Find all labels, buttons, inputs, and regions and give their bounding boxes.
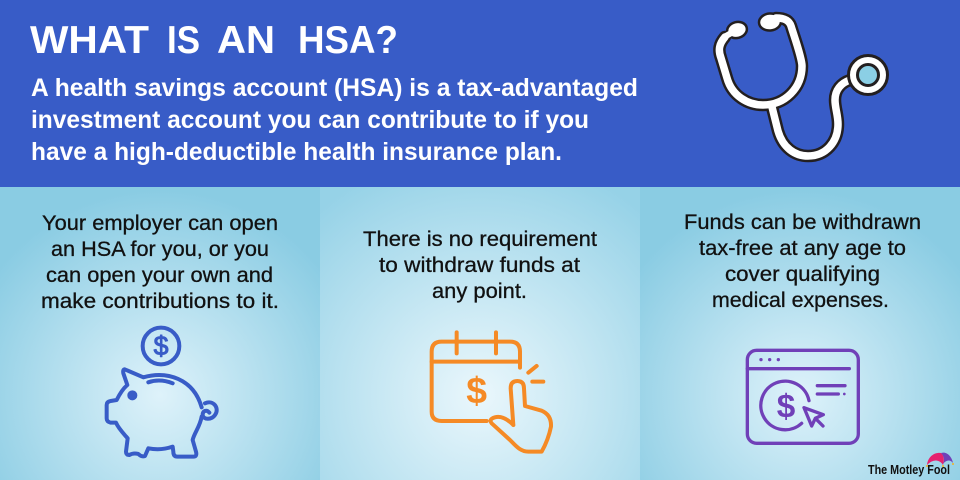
panel: no withdrawal requirement	[320, 187, 640, 480]
icon: browser window with dollar	[747, 350, 858, 443]
panel text: employer: an HSA for you, or you	[51, 238, 269, 261]
panel text: no requirement: There is no requirement	[363, 228, 597, 251]
intro text	[31, 74, 638, 166]
panel text: tax-free: Funds can be withdrawn	[684, 211, 921, 234]
panel: employer	[0, 187, 320, 480]
title: AN	[217, 19, 275, 62]
panel text: employer: make contributions to it.	[41, 290, 279, 313]
panel text: employer	[41, 212, 279, 313]
intro text: investment account you can contribute to if you	[31, 106, 589, 134]
title: IS	[167, 19, 200, 62]
panel text: no requirement	[363, 228, 597, 303]
panel text: tax-free: medical expenses.	[712, 289, 889, 312]
header band	[0, 0, 960, 187]
intro text: have a high-deductible health insurance plan.	[31, 138, 562, 166]
panel text: no requirement: to withdraw funds at	[379, 254, 580, 277]
title: HSA?	[298, 19, 398, 62]
panel text: tax-free	[684, 211, 921, 312]
logo: The Motley Fool	[868, 453, 954, 477]
panel text: employer: can open your own and	[46, 264, 273, 287]
panel text: tax-free: tax-free at any age to	[699, 237, 906, 260]
icon: stethoscope	[719, 13, 888, 156]
icon: piggy bank	[107, 328, 217, 457]
panel text: tax-free: cover qualifying	[725, 263, 880, 286]
icon: calendar and hand	[432, 332, 551, 452]
icon: browser window with dollar: $	[777, 388, 796, 425]
icon: jester hat	[926, 453, 954, 467]
intro text: A health savings account (HSA) is a tax-advantaged	[31, 74, 638, 102]
panel: tax-free withdrawals	[640, 187, 960, 480]
title: WHAT	[30, 19, 149, 62]
icon: calendar and hand: $	[466, 369, 487, 411]
title	[30, 19, 398, 62]
panel text: employer: Your employer can open	[42, 212, 278, 235]
panel text: no requirement: any point.	[432, 280, 527, 303]
icon: piggy bank: $	[154, 331, 169, 361]
